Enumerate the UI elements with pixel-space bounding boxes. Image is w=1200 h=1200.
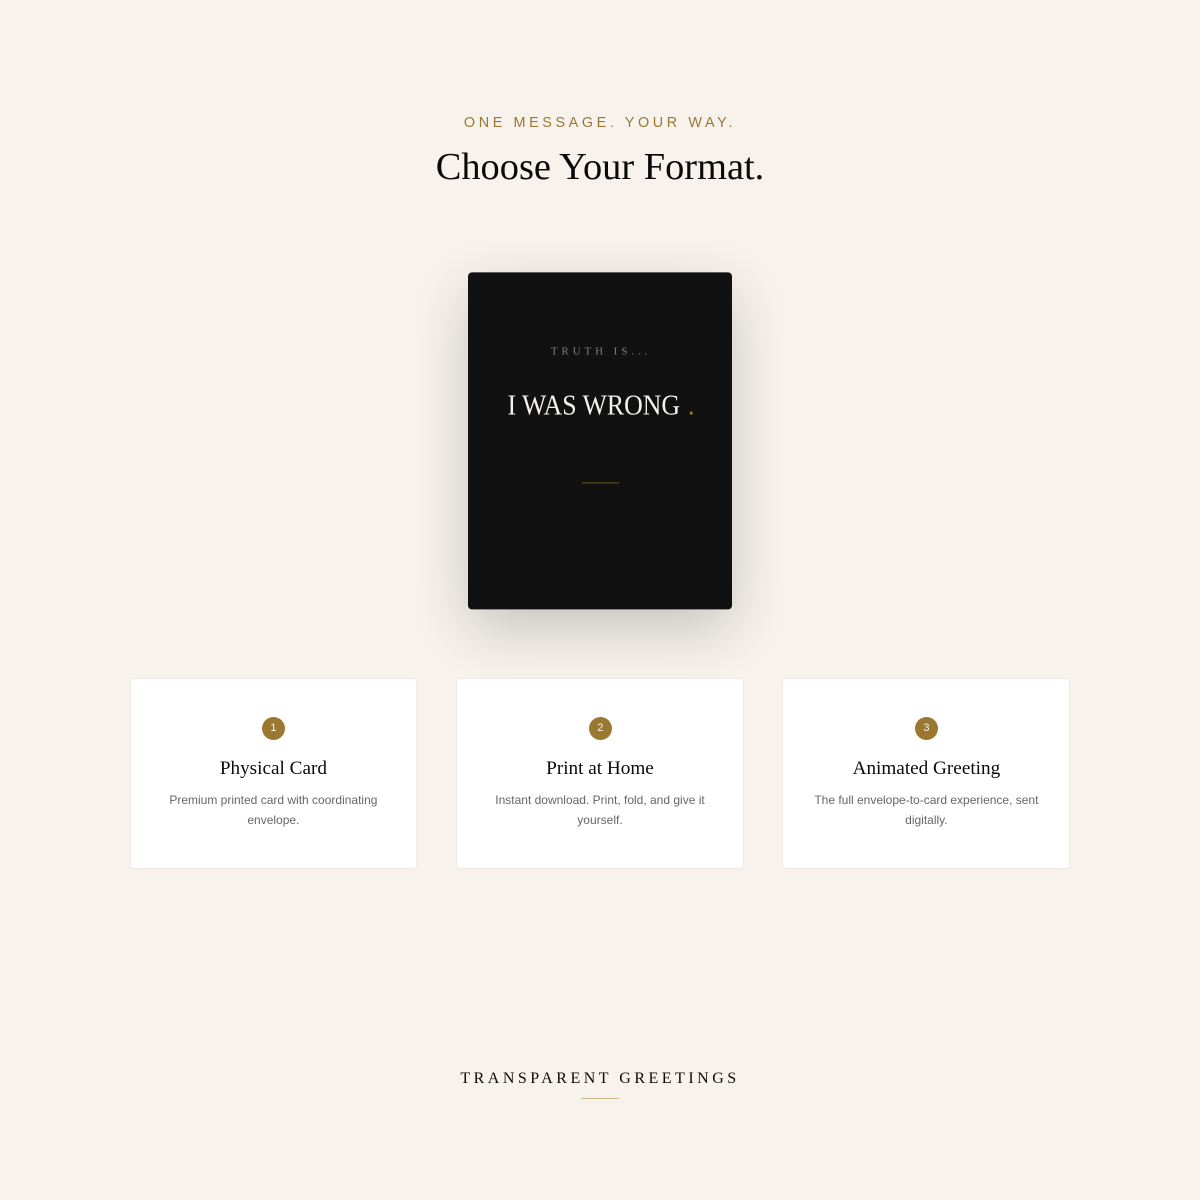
number badge 1	[262, 717, 285, 740]
card divider	[582, 482, 619, 483]
card eyebrow: TRUTH IS...	[551, 345, 651, 357]
description 2	[495, 793, 705, 827]
footer rule	[581, 1098, 619, 1099]
footer brand: TRANSPARENT GREETINGS	[460, 1070, 740, 1087]
card headline: I WAS WRONG .	[507, 389, 694, 421]
panel: black card	[468, 272, 732, 609]
description 3	[814, 793, 1038, 827]
heading: print at home: Print at Home	[546, 758, 654, 779]
description 1	[169, 793, 377, 827]
panel: option 3	[782, 678, 1070, 869]
number badge 1: 1	[270, 722, 276, 734]
description 3: The full envelope-to-card experience, sent	[814, 793, 1038, 807]
number badge 3	[915, 717, 938, 740]
description 2: Instant download. Print, fold, and give it	[495, 793, 705, 807]
number badge 2	[589, 717, 612, 740]
description 2: yourself.	[577, 813, 623, 827]
eyebrow text: ONE MESSAGE. YOUR WAY.	[464, 115, 736, 131]
panel: option 2	[456, 678, 744, 869]
heading: animated greeting: Animated Greeting	[853, 758, 1000, 779]
number badge 2: 2	[597, 722, 603, 734]
description 1: envelope.	[247, 813, 299, 827]
description 1: Premium printed card with coordinating	[169, 793, 377, 807]
panel: option 1	[130, 678, 417, 869]
title: Choose Your Format.	[436, 146, 764, 188]
heading: physical card: Physical Card	[220, 758, 327, 779]
number badge 3: 3	[923, 722, 929, 734]
description 3: digitally.	[905, 813, 948, 827]
